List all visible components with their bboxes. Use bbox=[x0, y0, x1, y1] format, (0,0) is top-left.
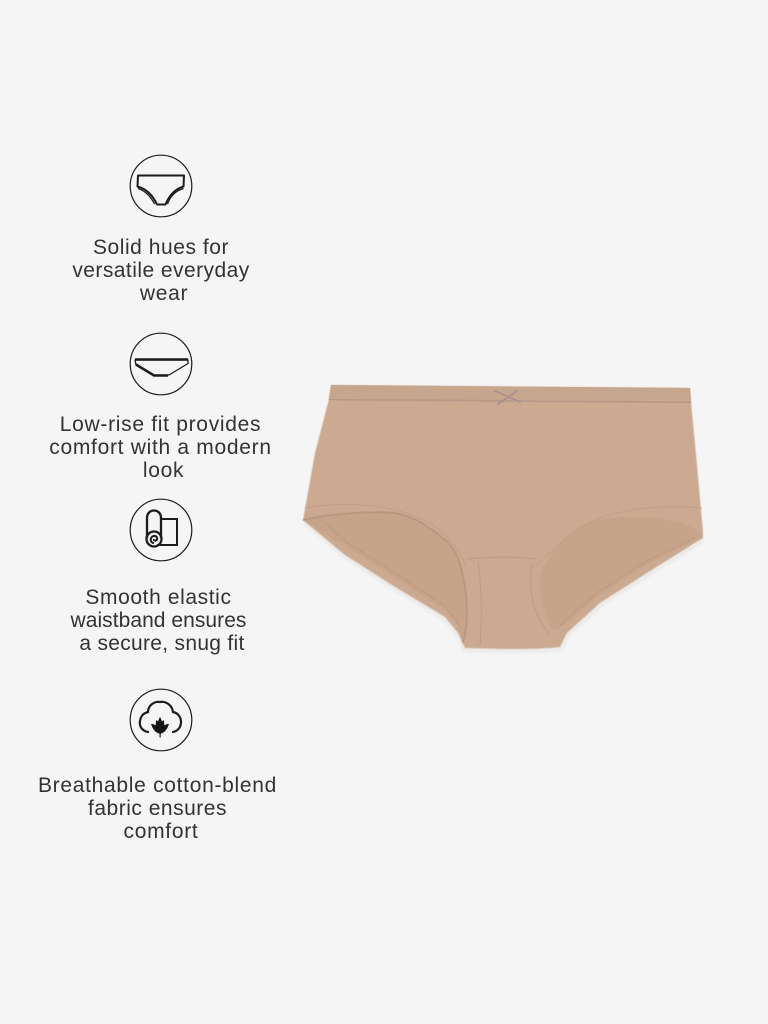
text: smooth elastic: waistband ensures bbox=[71, 609, 246, 632]
icon: briefs bbox=[130, 154, 192, 218]
text: low-rise fit: look bbox=[143, 459, 184, 482]
text: smooth elastic bbox=[70, 586, 246, 655]
leg opening shadow line bbox=[303, 512, 467, 643]
bow bbox=[495, 391, 520, 404]
text: smooth elastic: a secure, snug fit bbox=[79, 632, 245, 655]
waistband bbox=[329, 385, 691, 402]
text: low-rise fit: comfort with a modern bbox=[49, 436, 272, 459]
text: solid hues: versatile everyday bbox=[72, 259, 250, 282]
text: solid hues: wear bbox=[140, 282, 188, 305]
lower hem stitching bbox=[322, 521, 695, 630]
inner back panel: left bbox=[303, 512, 467, 643]
text: solid hues bbox=[72, 236, 250, 305]
text: breathable cotton: fabric ensures bbox=[88, 797, 227, 820]
text: low-rise fit bbox=[49, 413, 272, 482]
text: low-rise fit: Low-rise fit provides bbox=[60, 413, 261, 436]
icon: low-rise bbox=[130, 332, 192, 396]
inner back panel: right bbox=[540, 517, 702, 630]
icon: cotton boll bbox=[130, 688, 192, 752]
product photo: beige briefs bbox=[302, 384, 704, 652]
text: breathable cotton bbox=[38, 774, 277, 843]
soft drop shadow bbox=[305, 522, 703, 651]
text: smooth elastic: Smooth elastic bbox=[85, 586, 232, 609]
text: solid hues: Solid hues for bbox=[93, 236, 229, 259]
garment body bbox=[303, 385, 703, 649]
text: breathable cotton: comfort bbox=[124, 820, 198, 843]
icon: fabric roll bbox=[130, 498, 192, 562]
gusset bbox=[466, 557, 549, 645]
front hem stitching bbox=[305, 504, 702, 566]
text: breathable cotton: Breathable cotton-blend bbox=[38, 774, 277, 797]
